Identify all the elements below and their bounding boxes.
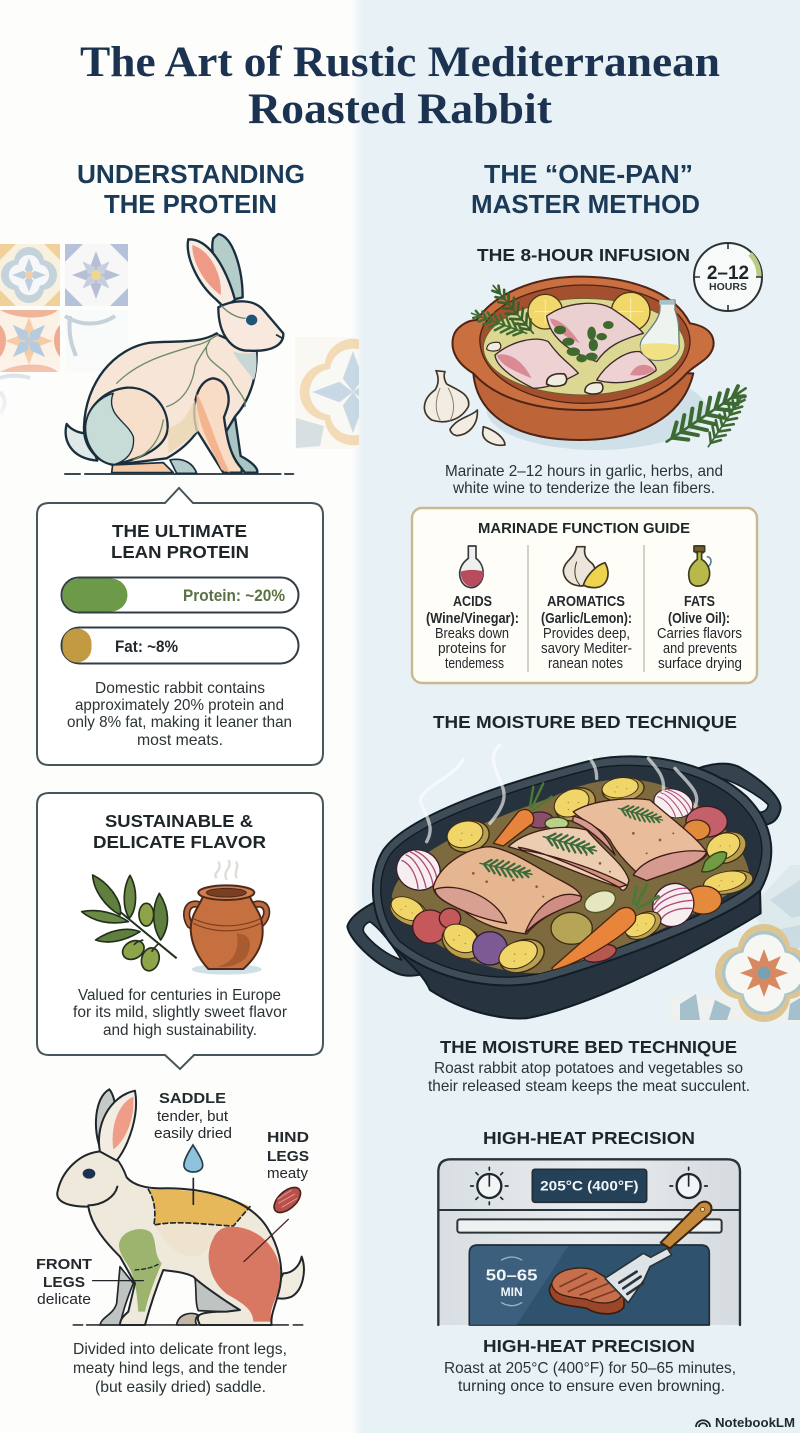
card body text: and high sustainability. [103, 1022, 257, 1039]
card heading: DELICATE FLAVOR [93, 832, 266, 852]
timer: 50–65 [486, 1268, 538, 1285]
label: saddle: tender, but [157, 1109, 228, 1125]
oven window [469, 1245, 709, 1325]
label: hind legs: meaty [267, 1166, 309, 1182]
card heading [93, 811, 266, 852]
column: fats [657, 593, 742, 672]
icon: garlic and lemon [563, 547, 608, 588]
card heading: SUSTAINABLE & [105, 811, 253, 831]
heading: understanding the protein: THE PROTEIN [104, 191, 277, 219]
diagram: rabbit anatomy cuts [57, 1089, 304, 1325]
label: front legs: LEGS [43, 1274, 85, 1291]
icon: olive oil bottle [689, 546, 711, 586]
card body text [67, 680, 292, 749]
column: fats: Carries flavors [657, 626, 742, 642]
vegetable bed [392, 779, 750, 973]
heading: the one-pan master method [471, 161, 700, 219]
oven body [438, 1159, 740, 1325]
panel: the ultimate lean protein [37, 488, 323, 765]
text: moisture bed technique caption: THE MOISTURE BED TECHNIQUE [440, 1037, 737, 1057]
protein bar: Protein: ~20% [183, 587, 285, 605]
column: acids: Breaks down [435, 626, 509, 642]
icon: clock 2-12 hours: 2–12 [707, 263, 749, 284]
card body text: most meats. [137, 732, 223, 749]
label: saddle [154, 1090, 232, 1142]
icon: water drop [184, 1145, 203, 1172]
spatula [605, 1202, 711, 1303]
rosemary garnishes [478, 802, 664, 881]
text: anatomy caption [73, 1341, 288, 1396]
pan rim [373, 756, 771, 985]
heading: the moisture bed technique (top): THE MOISTURE BED TECHNIQUE [433, 712, 737, 732]
decorative tile: mid right of left panel [295, 337, 359, 449]
column: aromatics: ranean notes [548, 656, 623, 672]
text: moisture bed technique caption: their released steam keeps the meat succulent. [428, 1078, 750, 1095]
pan body [393, 887, 761, 1019]
title: Roasted Rabbit [248, 86, 553, 133]
illustration: seated rabbit [65, 234, 293, 474]
timer: MIN [501, 1285, 523, 1299]
oven door handle [457, 1219, 722, 1233]
pan handle holes [363, 778, 768, 960]
card body text [73, 987, 288, 1039]
text: anatomy caption: meaty hind legs, and the tender [73, 1360, 288, 1377]
heading: the one-pan master method: THE “ONE-PAN” [484, 161, 693, 189]
heading: the 8-hour infusion: THE 8-HOUR INFUSION [477, 245, 690, 265]
text: high-heat precision caption: turning once to ensure even browning. [458, 1378, 725, 1395]
label: front legs: delicate [37, 1292, 91, 1308]
text: anatomy caption: (but easily dried) saddle. [95, 1379, 266, 1396]
column: fats: (Olive Oil): [668, 610, 730, 627]
panel: sustainable and delicate flavor [37, 793, 323, 1069]
label: saddle: SADDLE [159, 1090, 226, 1107]
card outline with pointer [37, 488, 323, 765]
column: fats: and prevents [663, 641, 737, 657]
label: hind legs [267, 1129, 309, 1182]
card body text: for its mild, slightly sweet flavor [73, 1004, 288, 1021]
title: The Art of Rustic Mediterranean [80, 39, 720, 86]
column: acids [426, 593, 519, 672]
timer [486, 1257, 538, 1306]
text: marinate caption [445, 463, 723, 497]
text: high-heat precision caption: HIGH-HEAT PRECISION [483, 1336, 695, 1356]
guide heading: MARINADE FUNCTION GUIDE [478, 521, 690, 537]
card heading [111, 521, 249, 562]
column: fats: FATS [684, 593, 715, 610]
card body text: approximately 20% protein and [75, 697, 284, 714]
pan handles [347, 764, 781, 976]
display: temperature [532, 1169, 647, 1202]
column: aromatics: Provides deep, [543, 626, 630, 642]
icon: olive branch [82, 875, 177, 973]
guide frame [412, 508, 757, 683]
steam wisps [420, 745, 697, 842]
panel: marinade function guide [412, 508, 757, 683]
text: marinate caption: white wine to tenderize the lean fibers. [452, 480, 715, 497]
card body text: Valued for centuries in Europe [78, 987, 281, 1004]
title [80, 39, 720, 133]
card heading: LEAN PROTEIN [111, 542, 249, 562]
column: aromatics: AROMATICS [547, 593, 625, 610]
card heading: THE ULTIMATE [112, 521, 247, 541]
heading: understanding the protein: UNDERSTANDING [77, 161, 305, 189]
text: moisture bed technique caption: Roast rabbit atop potatoes and vegetables so [434, 1060, 743, 1077]
icon: terracotta jar with steam [187, 860, 267, 975]
decorative tiles: left panel [0, 244, 128, 414]
oven knobs [471, 1167, 707, 1205]
label: hind legs: LEGS [267, 1148, 309, 1165]
label: hind legs: HIND [267, 1129, 309, 1146]
display: temperature: 205°C (400°F) [540, 1178, 638, 1194]
roasted rabbit pieces [433, 799, 707, 934]
illustration: cast iron roasting pan with rabbit and vegetables [347, 745, 781, 1019]
label: front legs [36, 1256, 92, 1308]
illustration: marinating rabbit in terracotta dish [424, 277, 753, 452]
card outline with pointer [37, 793, 323, 1069]
text: moisture bed technique caption [428, 1037, 750, 1095]
label: front legs: FRONT [36, 1256, 92, 1273]
icon: muscle [270, 1183, 305, 1217]
icon: clock 2-12 hours: HOURS [709, 281, 747, 293]
text: high-heat precision caption [444, 1336, 736, 1395]
column: acids: proteins for [438, 641, 506, 657]
column: acids: (Wine/Vinegar): [426, 610, 519, 627]
illustration: oven with steak and spatula [438, 1159, 740, 1325]
column: aromatics: savory Mediter- [541, 641, 632, 657]
fat bar: Fat: ~8% [115, 638, 178, 656]
roasted vegetables [386, 775, 755, 979]
fat bar [62, 628, 298, 664]
heading: the one-pan master method: MASTER METHOD [471, 191, 700, 219]
text: anatomy caption: Divided into delicate front legs, [73, 1341, 287, 1358]
decorative tile: lower right panel [670, 865, 800, 1022]
heading: understanding the protein [77, 161, 305, 219]
text: high-heat precision caption: Roast at 205°C (400°F) for 50–65 minutes, [444, 1360, 736, 1377]
steak [549, 1268, 624, 1314]
heading: high-heat precision (top): HIGH-HEAT PRECISION [483, 1128, 695, 1148]
logo: NotebookLM: NotebookLM [715, 1415, 795, 1430]
column: fats: surface drying [658, 656, 742, 672]
label: saddle: easily dried [154, 1126, 232, 1142]
column: acids: ACIDS [453, 593, 492, 610]
column: acids: tendemess [445, 656, 504, 672]
icon: clock 2-12 hours [694, 243, 762, 311]
protein bar [62, 578, 298, 612]
card body text: only 8% fat, making it leaner than [67, 714, 292, 731]
seasoning specks [472, 832, 674, 898]
column: aromatics [541, 593, 632, 672]
icon: wine flask [460, 546, 484, 588]
card body text: Domestic rabbit contains [95, 680, 265, 697]
text: marinate caption: Marinate 2–12 hours in garlic, herbs, and [445, 463, 723, 480]
column: aromatics: (Garlic/Lemon): [541, 610, 632, 627]
